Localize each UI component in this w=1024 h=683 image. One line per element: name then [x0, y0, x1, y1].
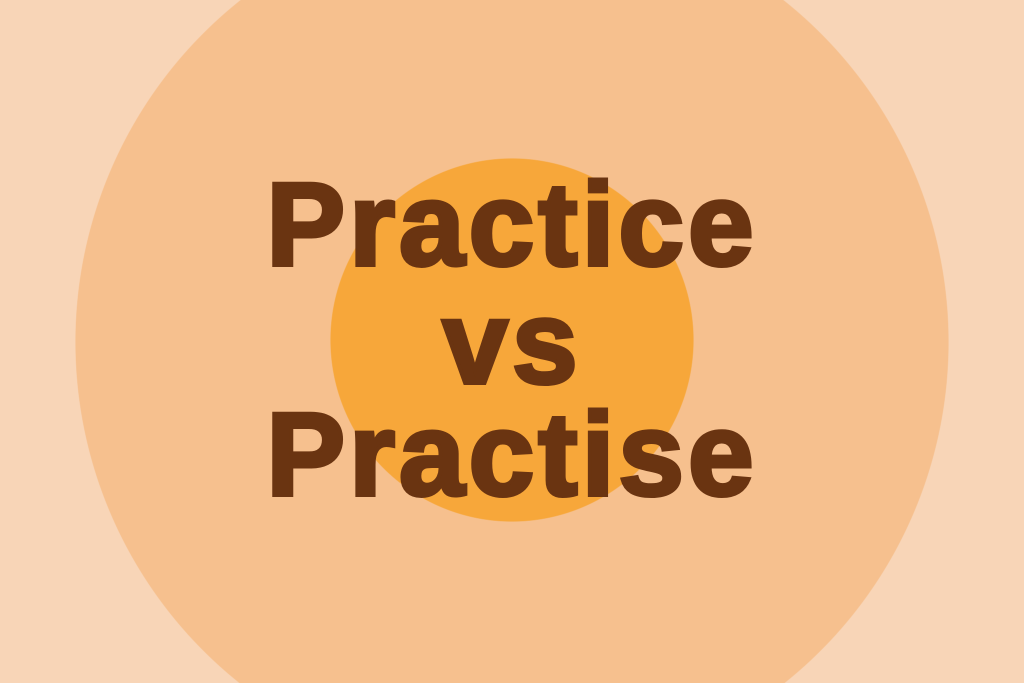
word: Practice: Practice [266, 159, 758, 291]
word: vs: vs [442, 277, 582, 409]
word: Practise: Practise [266, 389, 758, 521]
